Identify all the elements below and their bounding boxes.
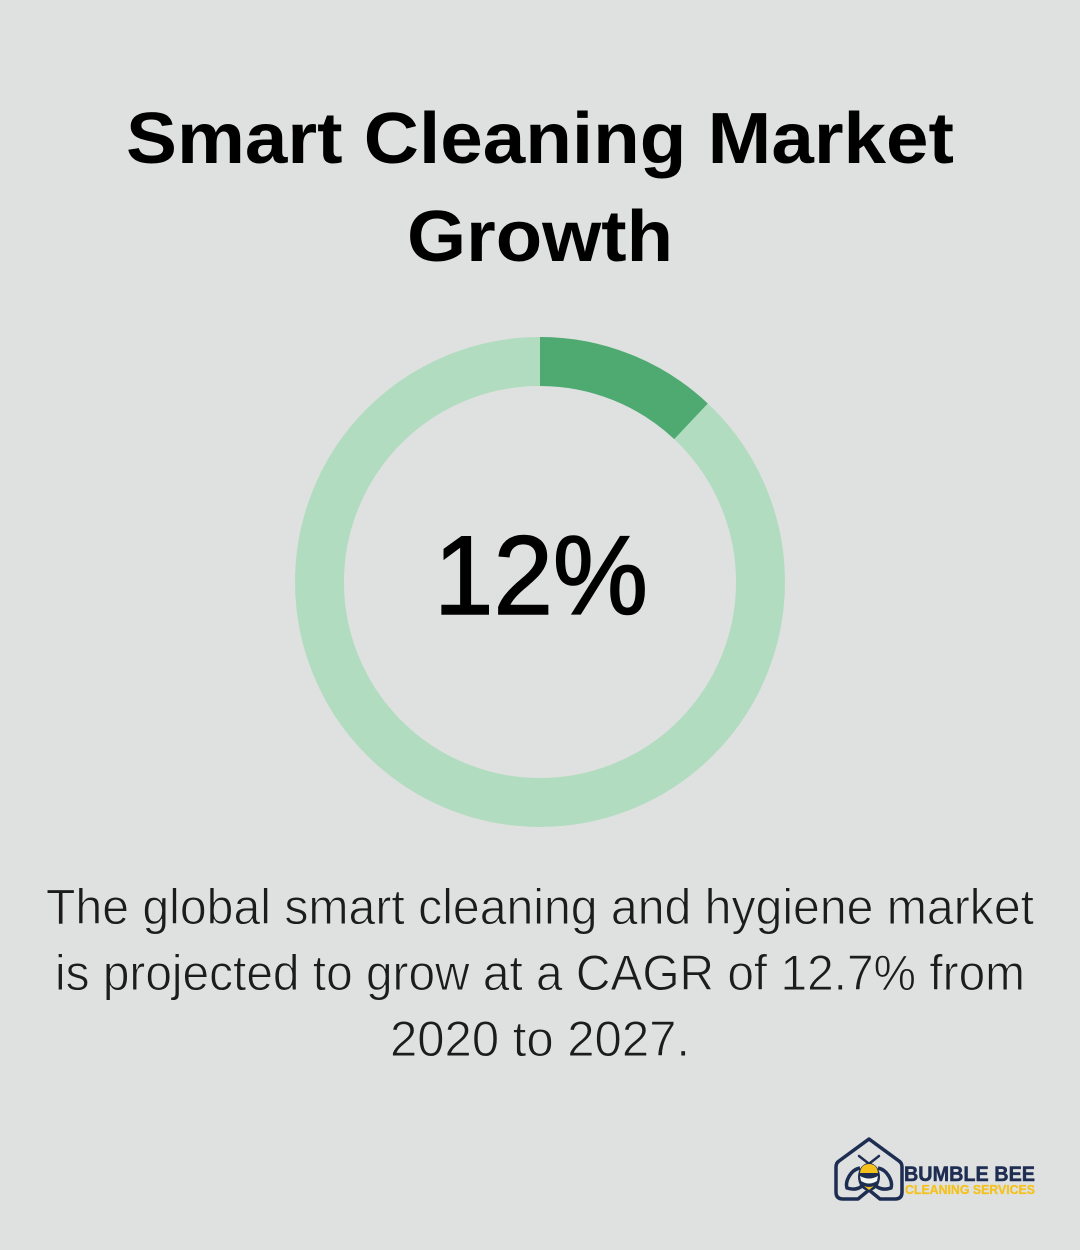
donut track [320,362,760,802]
donut chart [320,362,760,802]
description text [46,879,1034,1067]
logo tagline: CLEANING SERVICES [905,1183,1035,1197]
description text: is projected to grow at a CAGR of 12.7% from [55,945,1025,1001]
donut value segment: 12% [540,362,691,421]
title: Growth [407,197,673,277]
title [126,99,954,277]
logo wordmark: BUMBLE BEE [904,1163,1035,1186]
description text: 2020 to 2027. [390,1011,690,1067]
title: Smart Cleaning Market [126,99,954,179]
center value: 12% [434,513,648,638]
logo: Bumble Bee Cleaning Services [836,1139,1035,1199]
description text: The global smart cleaning and hygiene market [46,879,1034,935]
icon: house with bee [836,1139,902,1199]
